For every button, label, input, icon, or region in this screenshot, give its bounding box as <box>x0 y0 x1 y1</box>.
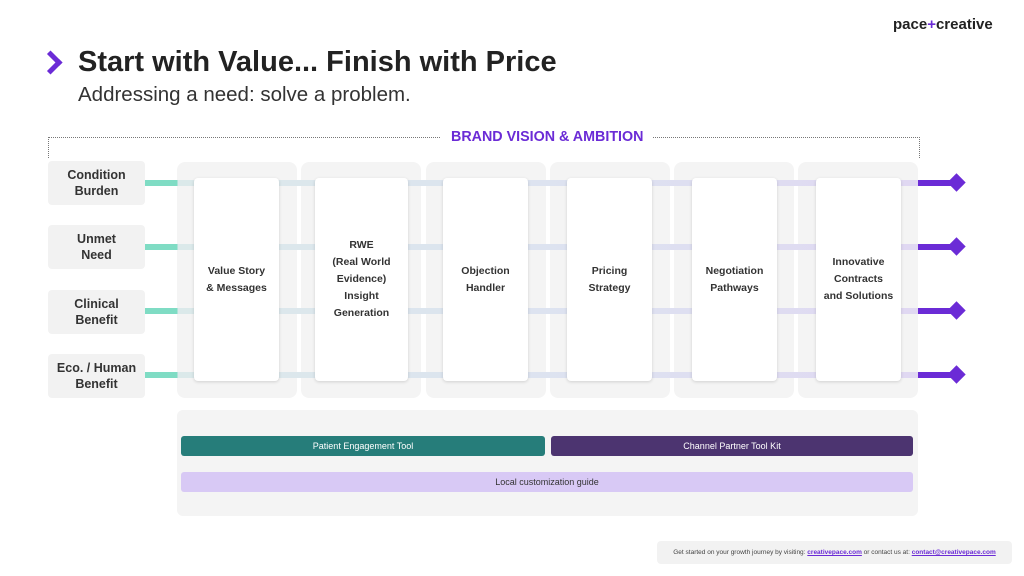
tools panel: Local customization guide <box>495 477 599 487</box>
input labels: Eco. / Human <box>57 361 136 375</box>
stage cards: Evidence) <box>337 273 386 285</box>
stage cards: Objection <box>461 264 510 276</box>
input labels: Unmet <box>77 232 116 246</box>
footer <box>657 541 1012 564</box>
tools panel <box>177 410 918 516</box>
input labels <box>48 161 145 398</box>
input labels: Burden <box>75 184 118 198</box>
subtitle: Addressing a need: solve a problem. <box>78 83 411 106</box>
stage cards: Innovative <box>833 256 884 268</box>
stage cards: RWE <box>349 239 374 251</box>
stage cards: (Real World <box>332 256 391 268</box>
icon: chevron <box>38 50 63 75</box>
title: Start with Value... Finish with Price <box>78 46 557 78</box>
stage cards: Pricing <box>592 264 627 276</box>
input labels: Clinical <box>74 297 119 311</box>
tools panel: Channel Partner Tool Kit <box>683 441 781 451</box>
tools panel: Patient Engagement Tool <box>313 441 413 451</box>
input labels: Benefit <box>75 377 118 391</box>
input labels: Need <box>81 248 112 262</box>
stage cards: Strategy <box>588 282 630 294</box>
stage cards: Value Story <box>208 264 265 276</box>
stage cards: Negotiation <box>706 264 763 276</box>
heading: brand vision: BRAND VISION & AMBITION <box>451 129 643 145</box>
logo: pace+creative <box>893 16 993 33</box>
stage cards: Pathways <box>710 282 759 294</box>
stage cards: Generation <box>334 307 389 319</box>
stage cards <box>193 178 902 383</box>
stage cards: Handler <box>466 282 505 294</box>
stage cards: Insight <box>344 290 379 302</box>
bracket <box>48 137 920 158</box>
stage cards: and Solutions <box>824 290 893 302</box>
stage cards: & Messages <box>206 282 267 294</box>
panels <box>145 162 966 398</box>
footer: Get started on your growth journey by visiting: creativepace.com or contact us at: contact@creativepace.com <box>673 549 996 556</box>
input labels: Condition <box>67 168 126 182</box>
input labels: Benefit <box>75 313 118 327</box>
stage cards: Contracts <box>834 273 883 285</box>
